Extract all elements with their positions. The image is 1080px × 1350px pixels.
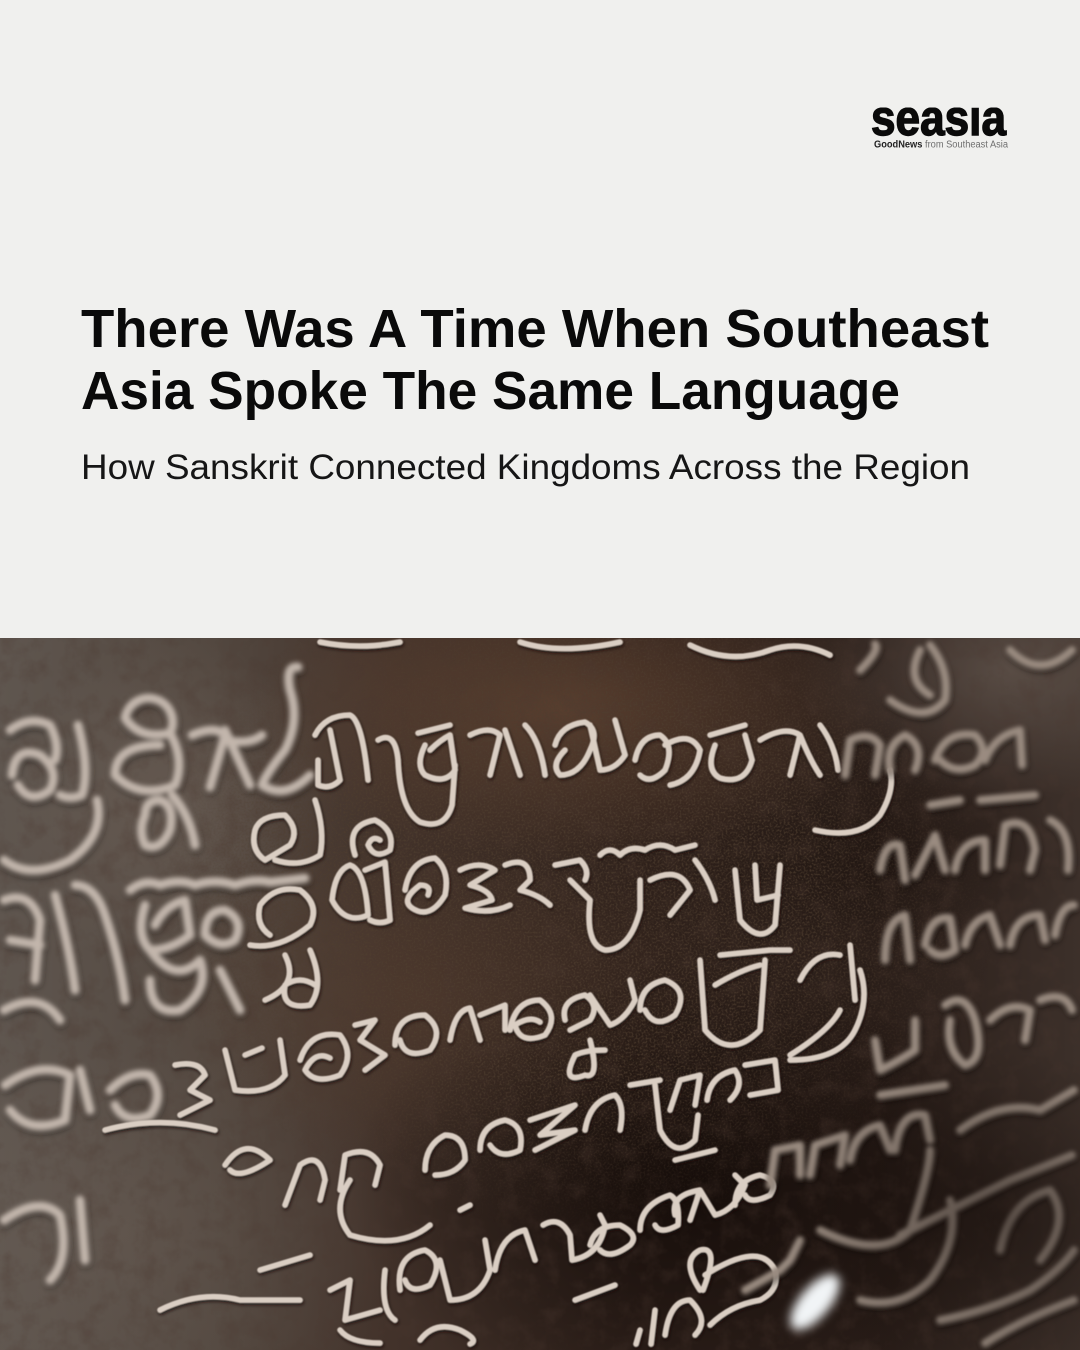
subtitle: How Sanskrit Connected Kingdoms Across the Region xyxy=(81,448,970,487)
logo wordmark: seasia xyxy=(871,90,1007,146)
script strokes, blurred left foreground xyxy=(4,667,310,1280)
logo: seasia xyxy=(872,108,1008,148)
logo tagline: GoodNews from Southeast Asia xyxy=(874,140,1009,150)
title: There Was A Time When Southeast xyxy=(81,299,989,359)
photo: carved Sanskrit stone inscription xyxy=(0,560,1080,1350)
script strokes, blurred right background xyxy=(745,644,1074,1343)
title: Asia Spoke The Same Language xyxy=(81,361,900,421)
title xyxy=(81,299,989,421)
script strokes, sharp centre xyxy=(105,642,891,1344)
bright white highlight spot xyxy=(782,1266,848,1338)
